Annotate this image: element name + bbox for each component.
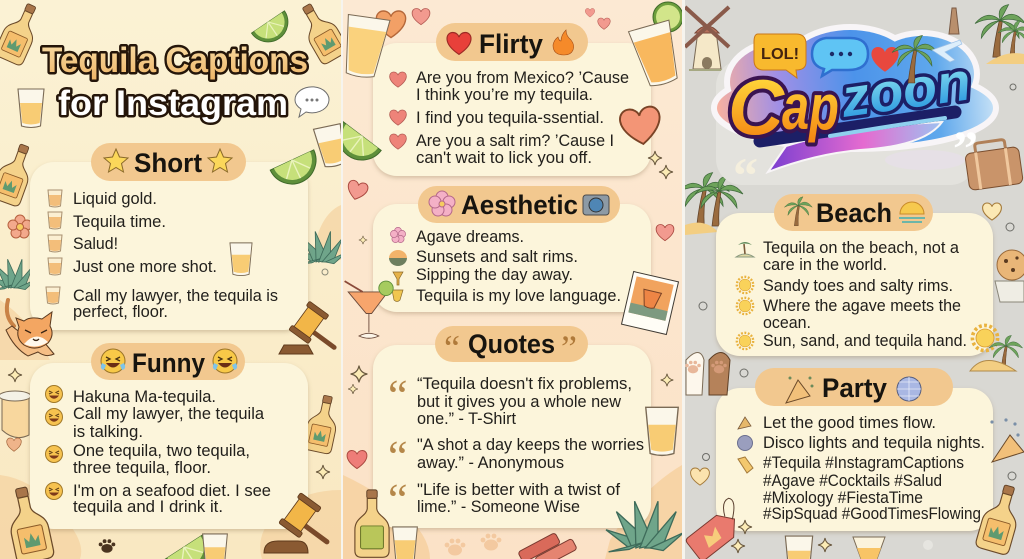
card: party xyxy=(716,388,993,531)
icon: sparkles xyxy=(648,151,673,179)
heading: funny: Funny xyxy=(132,348,205,378)
icon: suitcase xyxy=(964,138,1023,191)
list: short captions: Liquid gold. xyxy=(73,190,157,208)
icon: small palm island xyxy=(970,335,1023,371)
icon: bottom lime xyxy=(164,533,204,559)
title: Tequila Captions xyxy=(42,41,308,80)
list: flirty captions: Are you a salt rim? ’Cause I xyxy=(416,132,614,150)
list: flirty captions: I think you’re my tequila. xyxy=(416,86,593,104)
card: funny xyxy=(30,363,308,529)
list: short captions: Salud! xyxy=(73,235,118,253)
icon: left glass xyxy=(0,391,31,438)
icon: right lime xyxy=(270,149,317,185)
icon: gavel lower xyxy=(264,493,327,553)
icon: speech bubble xyxy=(295,87,329,117)
icon: big heart cookie xyxy=(619,105,663,147)
icon: tequila bottle lower left xyxy=(10,486,54,559)
list: funny captions: Call my lawyer, the tequila xyxy=(73,405,265,423)
icon: paws xyxy=(445,534,501,556)
icon: small diamonds xyxy=(8,368,330,479)
card: flirty xyxy=(373,43,651,176)
list: quotes: "A shot a day keeps the worries xyxy=(417,436,644,454)
heading: quotes xyxy=(435,326,588,368)
icon: lighthouse xyxy=(949,8,959,34)
list: quotes: “ xyxy=(388,475,408,524)
icon: small diamond xyxy=(359,236,367,244)
icon: shot bottom xyxy=(203,534,227,559)
icon: bottle lower xyxy=(355,490,389,557)
logo: capzoon: “ xyxy=(733,147,758,203)
icon: cat xyxy=(6,300,54,356)
card: short xyxy=(30,162,308,330)
icon: gavel upper xyxy=(289,301,334,347)
heading: quotes: Quotes xyxy=(468,329,555,359)
icon: small shot in card xyxy=(230,243,252,276)
icon: flower xyxy=(8,215,32,238)
list: quotes: one.” - T-Shirt xyxy=(417,410,516,428)
icon: shot glass xyxy=(18,89,44,128)
icon: faint bubble xyxy=(923,540,933,550)
icon: bottle xyxy=(975,481,1024,556)
panel: logo, beach and party xyxy=(679,0,1024,559)
heading: party xyxy=(755,368,953,406)
list: short captions: perfect, floor. xyxy=(73,303,168,321)
panel: short and funny captions xyxy=(0,0,350,559)
icon: cocktail xyxy=(345,281,393,338)
icon: heart right xyxy=(656,224,674,241)
icon: margarita glass left xyxy=(340,15,390,80)
list: aesthetic captions: Tequila is my love language. xyxy=(416,287,621,305)
list: funny captions: is talking. xyxy=(73,423,143,441)
heading: funny xyxy=(91,343,245,380)
list: aesthetic captions: Sunsets and salt rims. xyxy=(416,248,578,266)
icon: heart outline xyxy=(983,203,1001,220)
heading: aesthetic: Aesthetic xyxy=(461,190,578,220)
icon: agave left xyxy=(0,259,30,290)
icon: right bottle xyxy=(308,395,336,454)
heading: beach: Beach xyxy=(816,198,892,228)
heading: short: Short xyxy=(134,148,202,178)
list: short captions: Just one more shot. xyxy=(73,258,217,276)
list: short captions: Call my lawyer, the tequila is xyxy=(73,287,278,305)
icon: large agave xyxy=(606,501,684,552)
icon: heart lower xyxy=(347,450,367,469)
list: beach captions: Sandy toes and salty rims. xyxy=(763,277,953,295)
card: aesthetic xyxy=(373,204,651,312)
icon: palms top right xyxy=(975,5,1024,64)
icon: lime slice xyxy=(653,2,683,32)
icon: heart top xyxy=(412,8,430,25)
logo: capzoon xyxy=(717,30,993,203)
list: party captions and hashtags: #Mixology #FiestaTime xyxy=(763,489,923,507)
list: funny captions: tequila and I drink it. xyxy=(73,498,223,516)
list: short captions: Tequila time. xyxy=(73,213,166,231)
icon: paw xyxy=(99,539,115,553)
list: party captions and hashtags xyxy=(738,414,985,523)
icon: small hearts xyxy=(585,8,610,29)
heading: quotes: “ xyxy=(444,328,460,368)
icon: right shot glass xyxy=(312,123,341,168)
icon: bubbles xyxy=(699,84,1016,480)
icon: heart left xyxy=(691,468,709,485)
list: quotes: but it gives you a whole new xyxy=(417,393,621,411)
card: quotes xyxy=(373,345,651,528)
icon: agave right xyxy=(308,231,341,264)
list: party captions and hashtags: Let the good times flow. xyxy=(763,414,936,432)
icon: circle xyxy=(322,269,328,275)
icon: price tag xyxy=(681,497,751,559)
title: for Instagram xyxy=(58,84,288,123)
logo: capzoon: ap xyxy=(782,71,839,143)
icon: sun xyxy=(972,325,998,351)
list: beach captions: care in the world. xyxy=(763,256,887,274)
panel: flirty, aesthetic and quotes xyxy=(328,0,685,559)
heading: flirty: Flirty xyxy=(479,29,543,59)
list: beach captions: Where the agave meets the xyxy=(763,297,961,315)
list: quotes: “ xyxy=(388,371,408,420)
icon: small heart xyxy=(7,438,21,451)
heading: short xyxy=(91,143,246,181)
list: funny captions: three tequila, floor. xyxy=(73,459,211,477)
icon: lime top xyxy=(251,10,288,42)
icon: bacon xyxy=(518,527,577,559)
icon: shot lower xyxy=(393,527,417,559)
icon: salted shot xyxy=(646,407,678,455)
icon: lime left xyxy=(328,122,381,170)
heading: party: Party xyxy=(822,373,887,403)
list: beach captions: ocean. xyxy=(763,314,811,332)
list: quotes xyxy=(388,371,644,524)
panel: logo backing xyxy=(716,60,976,185)
list: flirty captions: can't wait to lick you off. xyxy=(416,149,592,167)
list: funny captions: One tequila, two tequila, xyxy=(73,442,250,460)
title xyxy=(42,41,308,123)
list: party captions and hashtags: #Agave #Cocktails #Salud xyxy=(763,472,942,490)
icon: sparkles xyxy=(731,520,832,553)
list: aesthetic captions: Sipping the day away. xyxy=(416,266,573,284)
list: beach captions: Tequila on the beach, not a xyxy=(763,239,960,257)
list: funny captions xyxy=(46,386,271,516)
list: aesthetic captions xyxy=(389,227,621,305)
list: flirty captions xyxy=(390,69,629,167)
list: quotes: “ xyxy=(388,432,408,481)
list: funny captions: Hakuna Ma-tequila. xyxy=(73,388,216,406)
icon: palms left xyxy=(679,173,743,235)
heading: quotes: ” xyxy=(561,328,577,368)
list: party captions and hashtags: Disco lights and tequila nights. xyxy=(763,434,985,452)
list: short captions xyxy=(46,190,278,321)
list: flirty captions: I find you tequila-ssential. xyxy=(416,109,604,127)
list: flirty captions: Are you from Mexico? ’Cause xyxy=(416,69,629,87)
icon: windmill xyxy=(685,7,729,71)
logo: capzoon: C xyxy=(728,63,786,151)
list: party captions and hashtags: #Tequila #InstagramCaptions xyxy=(763,454,964,472)
list: quotes: lime.” - Someone Wise xyxy=(417,498,580,516)
icon: gavel base upper xyxy=(279,345,313,354)
logo: capzoon: LOL! xyxy=(761,46,799,63)
list: funny captions: I'm on a seafood diet. I see xyxy=(73,482,271,500)
heading: aesthetic xyxy=(418,186,620,223)
icon: bottle left xyxy=(0,144,30,206)
list: beach captions: Sun, sand, and tequila hand. xyxy=(763,332,967,350)
list: beach captions xyxy=(736,239,967,350)
icon: bottom shots xyxy=(785,536,885,559)
list: quotes: away.” - Anonymous xyxy=(417,454,564,472)
card: beach xyxy=(716,213,993,356)
heading: beach xyxy=(774,194,933,231)
list: aesthetic captions: Agave dreams. xyxy=(416,228,524,246)
icon: cookie xyxy=(997,250,1024,280)
icon: bottle top left xyxy=(0,4,36,66)
list: quotes: “Tequila doesn't fix problems, xyxy=(417,375,632,393)
icon: party popper xyxy=(990,418,1024,462)
icon: orange heart xyxy=(376,11,406,38)
icon: polaroid xyxy=(622,272,678,334)
icon: bottle top right xyxy=(302,4,341,64)
icon: quote sparkles xyxy=(348,366,673,394)
logo: capzoon: ” xyxy=(953,120,978,176)
logo: capzoon: zoon xyxy=(836,51,974,129)
icon: margarita glass right xyxy=(629,20,685,89)
icon: raised paws xyxy=(685,352,730,395)
icon: heart left xyxy=(345,179,369,202)
icon: muffin xyxy=(995,281,1024,302)
heading: flirty xyxy=(436,23,588,61)
list: quotes: "Life is better with a twist of xyxy=(417,481,620,499)
list: party captions and hashtags: #SipSquad #GoodTimesFlowing xyxy=(763,505,981,523)
